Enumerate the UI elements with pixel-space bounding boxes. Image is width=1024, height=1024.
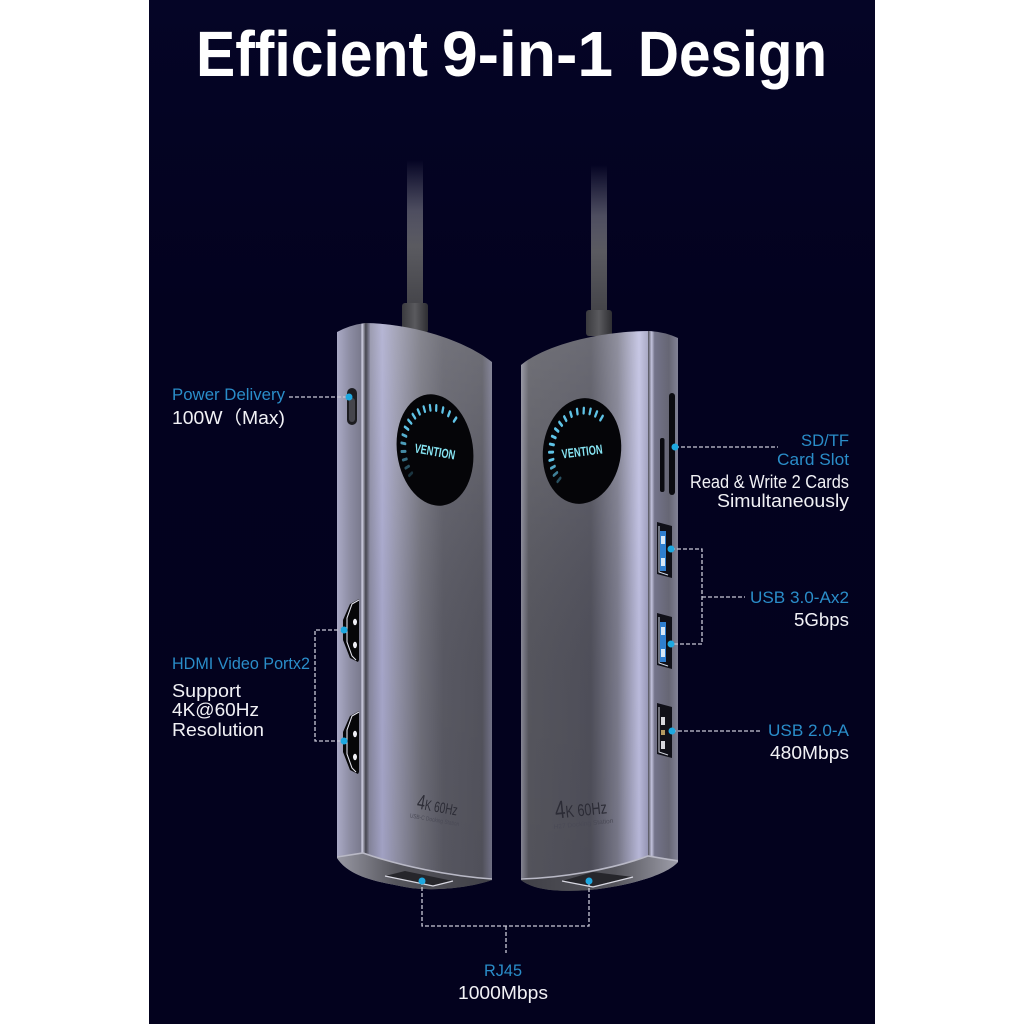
left 4K marking [409, 790, 464, 828]
callout: HDMI video ports: HDMI Video Portx2 [172, 654, 310, 673]
USB-C port [347, 388, 357, 425]
callout: RJ45 [418, 878, 592, 1003]
title: 9-in-1 [442, 18, 613, 90]
callout: SD/TF card slot: Card Slot [777, 450, 849, 469]
callout: SD/TF card slot [672, 431, 850, 511]
callout: power delivery [172, 385, 352, 428]
callout: HDMI video ports: Resolution [172, 719, 264, 740]
callout: USB 3.0 ports [668, 546, 849, 648]
right VENTION logo: VENTION [561, 442, 603, 461]
callout: USB 2.0 port [668, 721, 850, 763]
left RJ45 port [385, 871, 453, 886]
title: Efficient [196, 18, 428, 90]
callout: HDMI video ports: Support [172, 680, 241, 701]
callout: RJ45: 1000Mbps [458, 982, 548, 1003]
USB 3.0 port 2 [657, 613, 672, 669]
callout: USB 2.0 port: 480Mbps [770, 742, 849, 763]
right dial ticks [546, 405, 603, 486]
callout: SD/TF card slot: SD/TF [801, 431, 849, 450]
callout: power delivery: 100W（Max) [172, 407, 285, 428]
callout: HDMI video ports [172, 626, 348, 744]
callout: power delivery: Power Delivery [172, 385, 285, 404]
callout: SD/TF card slot: Read & Write 2 Cards [690, 471, 849, 492]
title: Design [638, 18, 827, 90]
USB 2.0 port [657, 703, 672, 758]
right 4K marking: 4K 60Hz [553, 791, 608, 825]
left cable [402, 160, 428, 333]
right logo display [537, 394, 627, 508]
callout: USB 3.0 ports: 5Gbps [794, 609, 849, 630]
left hub device [330, 160, 495, 900]
left hub body [330, 320, 495, 900]
left logo display [390, 389, 480, 511]
left VENTION logo: VENTION [413, 441, 456, 462]
callout: USB 3.0 ports: USB 3.0-Ax2 [750, 588, 849, 607]
SD and TF card slots [660, 393, 675, 495]
callout: USB 2.0 port: USB 2.0-A [768, 721, 850, 740]
right hub body [518, 325, 680, 900]
USB 3.0 port 1 [657, 522, 672, 578]
callout: SD/TF card slot: Simultaneously [717, 490, 850, 511]
left 4K marking: USB-C Docking Station [409, 813, 460, 828]
callout: RJ45: RJ45 [484, 961, 522, 980]
background panel [149, 0, 875, 1024]
left 4K marking: 4K 60Hz [415, 791, 460, 820]
callout: HDMI video ports: 4K@60Hz [172, 699, 259, 720]
left dial ticks [396, 402, 463, 476]
right hub device [518, 165, 680, 900]
right 4K marking: H27 Docking Station [553, 818, 614, 831]
right 4K marking [550, 791, 614, 831]
HDMI port 2 [343, 711, 359, 774]
right RJ45 port [562, 872, 633, 887]
HDMI port 1 [343, 599, 359, 662]
right cable [586, 165, 612, 336]
title [196, 18, 827, 90]
